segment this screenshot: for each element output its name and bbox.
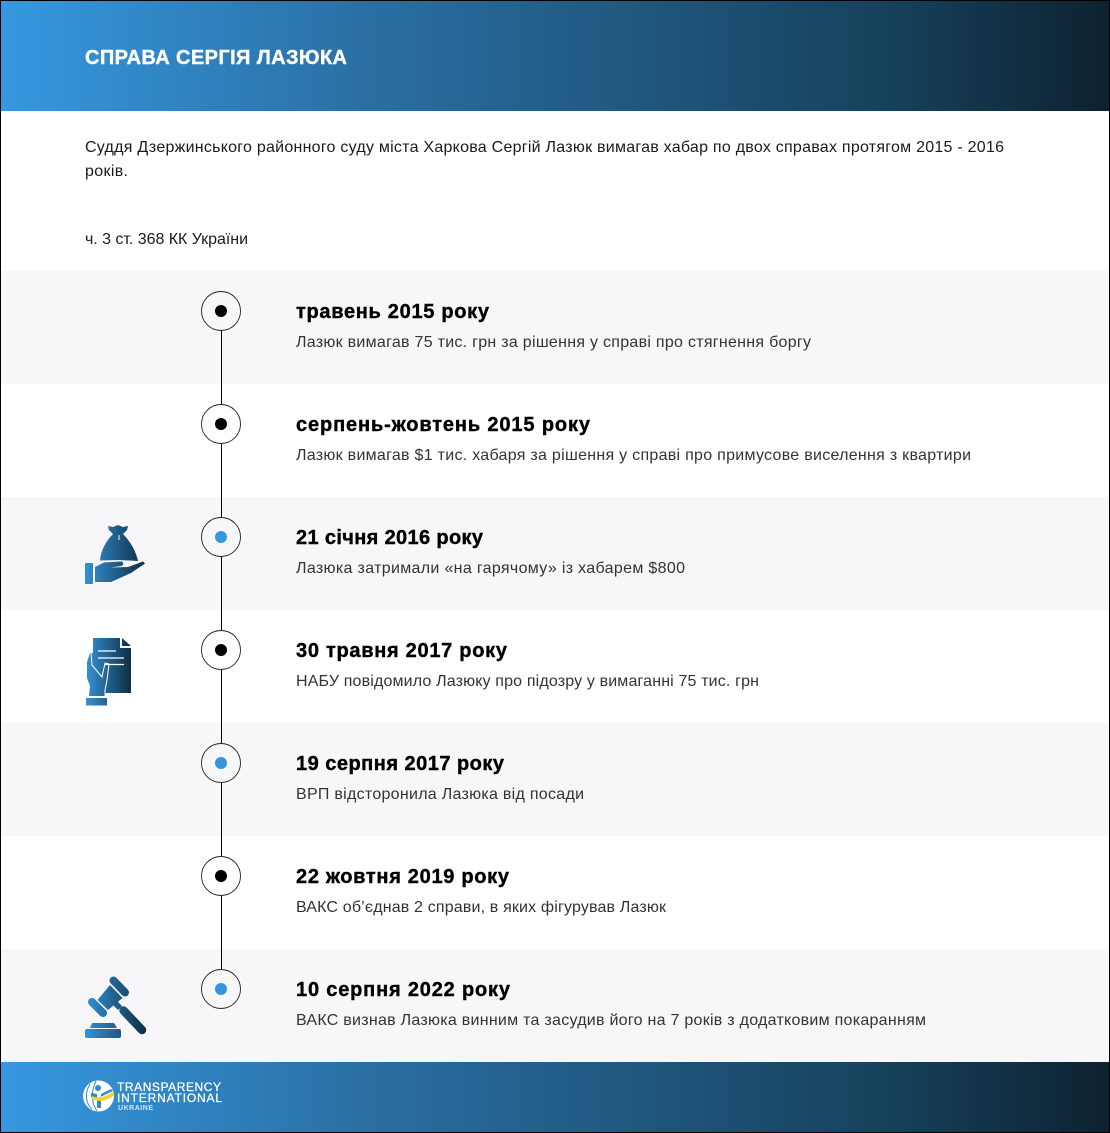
- timeline event: 22 Oct 2019: 22 жовтня 2019 року: [296, 866, 510, 888]
- logo: Transparency International Ukraine: [83, 1080, 222, 1112]
- intro text: Суддя Дзержинського районного суду міста Харкова Сергій Лазюк вимагав хабар по двох справах протягом 2015 - 2016: [85, 139, 1004, 156]
- timeline event: 21 Jan 2016: 21 січня 2016 року: [296, 527, 484, 549]
- timeline event: Aug-Oct 2015: серпень-жовтень 2015 року: [296, 414, 591, 436]
- timeline line: [220, 311, 222, 989]
- row backgrounds: [1, 271, 1109, 1062]
- legal article: ч. 3 ст. 368 КК України: [85, 231, 248, 248]
- intro text: [85, 139, 1004, 180]
- icon: document in hand: [86, 638, 131, 706]
- timeline event: May 2015: Лазюк вимагав 75 тис. грн за рішення у справі про стягнення боргу: [296, 334, 811, 351]
- timeline event: 10 Aug 2022: 10 серпня 2022 року: [296, 979, 511, 1001]
- footer banner: [1, 1062, 1109, 1132]
- timeline event: May 2015: травень 2015 року: [296, 301, 490, 323]
- timeline event: 10 Aug 2022: ВАКС визнав Лазюка винним та засудив його на 7 років з додатковим покаранням: [296, 1012, 926, 1029]
- intro text: років.: [85, 163, 128, 180]
- timeline event: 21 Jan 2016: Лазюка затримали «на гарячому» із хабарем $800: [296, 560, 685, 577]
- timeline event: 21 Jan 2016: [202, 518, 685, 577]
- logo: Transparency International Ukraine: TRANSPARENCY: [117, 1080, 221, 1094]
- timeline event: 30 May 2017: 30 травня 2017 року: [296, 640, 508, 662]
- timeline event: 22 Oct 2019: [202, 856, 667, 916]
- timeline event: Aug-Oct 2015: [202, 404, 971, 464]
- timeline event: 19 Aug 2017: ВРП відсторонила Лазюка від посади: [296, 786, 584, 803]
- title: СПРАВА СЕРГІЯ ЛАЗЮКА: [85, 47, 347, 69]
- icon: judge gavel: [85, 980, 142, 1038]
- timeline event: 30 May 2017: [202, 630, 759, 690]
- icon: money bag in hand: [85, 525, 145, 584]
- timeline event: 22 Oct 2019: ВАКС об’єднав 2 справи, в яких фігурував Лазюк: [296, 899, 667, 916]
- timeline event: 19 Aug 2017: [202, 744, 584, 803]
- timeline event: 10 Aug 2022: [202, 970, 926, 1029]
- logo: Transparency International Ukraine: UKRAINE: [118, 1105, 153, 1112]
- timeline event: May 2015: [202, 292, 811, 351]
- timeline event: 30 May 2017: НАБУ повідомило Лазюку про підозру у вимаганні 75 тис. грн: [296, 673, 759, 690]
- header banner: [1, 1, 1109, 111]
- timeline event: 19 Aug 2017: 19 серпня 2017 року: [296, 753, 505, 775]
- logo: Transparency International Ukraine: INTERNATIONAL: [117, 1091, 222, 1105]
- timeline event: Aug-Oct 2015: Лазюк вимагав $1 тис. хабаря за рішення у справі про примусове виселення з квартири: [296, 447, 971, 464]
